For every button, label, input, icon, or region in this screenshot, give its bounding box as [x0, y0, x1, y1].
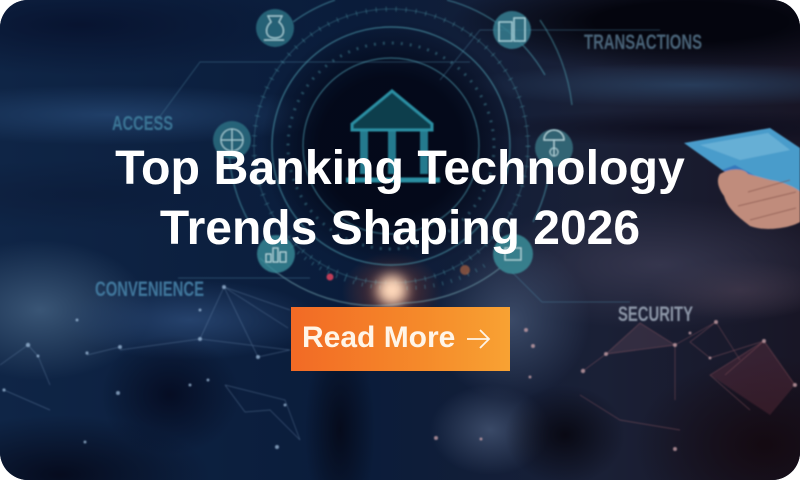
icon: chart circle: [257, 235, 295, 273]
connector lines: [150, 30, 660, 302]
title line 2: Trends Shaping 2026: [160, 202, 640, 255]
label: SECURITY: SECURITY: [618, 303, 693, 326]
icon: bank building: [346, 91, 440, 180]
label: TRANSACTIONS: TRANSACTIONS: [584, 31, 702, 54]
tablet and hand: [684, 128, 800, 229]
icon: office buildings: [493, 11, 531, 49]
button: Read More: Read More: [302, 321, 455, 354]
icon: money bag in hand: [256, 9, 294, 47]
icon: umbrella coin: [535, 129, 573, 167]
label: CONVENIENCE: CONVENIENCE: [95, 278, 204, 301]
network mesh: blue left: [0, 285, 300, 449]
network mesh: red right: [434, 320, 797, 451]
circular tech rings: [229, 0, 572, 306]
icon: arrow: [467, 329, 490, 349]
icon: globe: [213, 121, 251, 159]
button: Read More: [291, 307, 510, 371]
label: ACCESS: ACCESS: [112, 113, 173, 135]
icon: card circle: [493, 234, 533, 274]
lens flare: [326, 265, 470, 305]
title line 1: Top Banking Technology: [115, 141, 685, 195]
